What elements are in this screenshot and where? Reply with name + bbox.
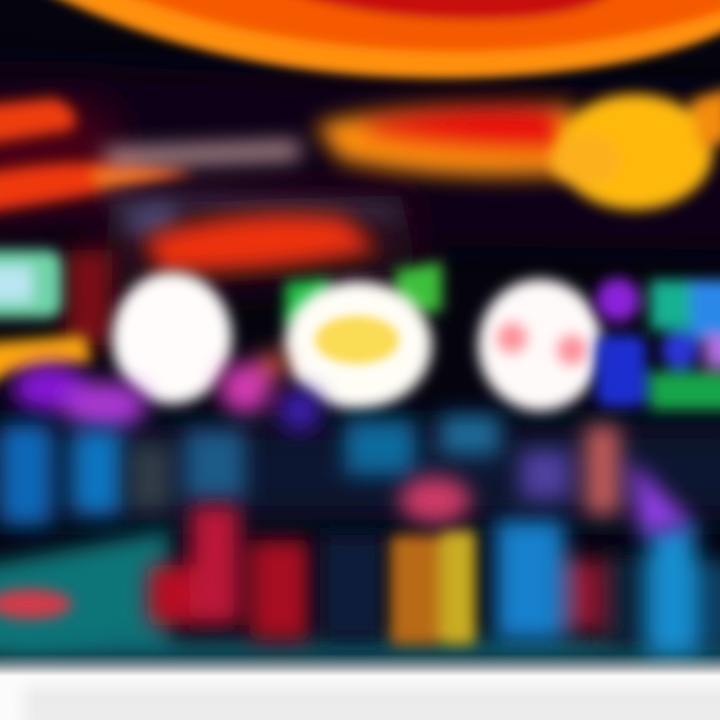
- left red streaks: [0, 98, 195, 216]
- yellow inner shape: [315, 316, 399, 364]
- yellow glow: [550, 88, 720, 210]
- upper right red and orange streak: [315, 104, 600, 176]
- pink stack top: [399, 476, 471, 524]
- red oval on floor: [0, 589, 72, 619]
- left purple shapes: [12, 364, 147, 429]
- centre dark blue columns: [130, 415, 500, 510]
- top orange arc: [5, 0, 720, 78]
- bottom white strip: [0, 654, 720, 720]
- left blue columns: [0, 425, 122, 525]
- green accents around centre circle: [285, 262, 442, 325]
- grey-white streak and rays: [100, 142, 400, 235]
- white circle right: [478, 279, 602, 411]
- centre magenta accents: [219, 351, 322, 432]
- centre red shape: [145, 214, 378, 272]
- red chip stacks: [148, 505, 310, 640]
- right colourful blocks: [596, 278, 720, 410]
- dark red column: [66, 250, 112, 345]
- dark stack: [320, 535, 385, 640]
- white circle left: [112, 272, 232, 404]
- blue stacks right: [495, 520, 720, 655]
- white circle centre: [284, 281, 432, 409]
- pink dots: [497, 323, 587, 365]
- upper right multicolour column: [520, 425, 695, 535]
- left yellow and orange streak: [0, 335, 92, 400]
- left green panel: [0, 250, 62, 318]
- dark maroon upper band: [0, 60, 720, 520]
- floor teal: [0, 530, 720, 662]
- yellow and orange stack: [390, 530, 476, 645]
